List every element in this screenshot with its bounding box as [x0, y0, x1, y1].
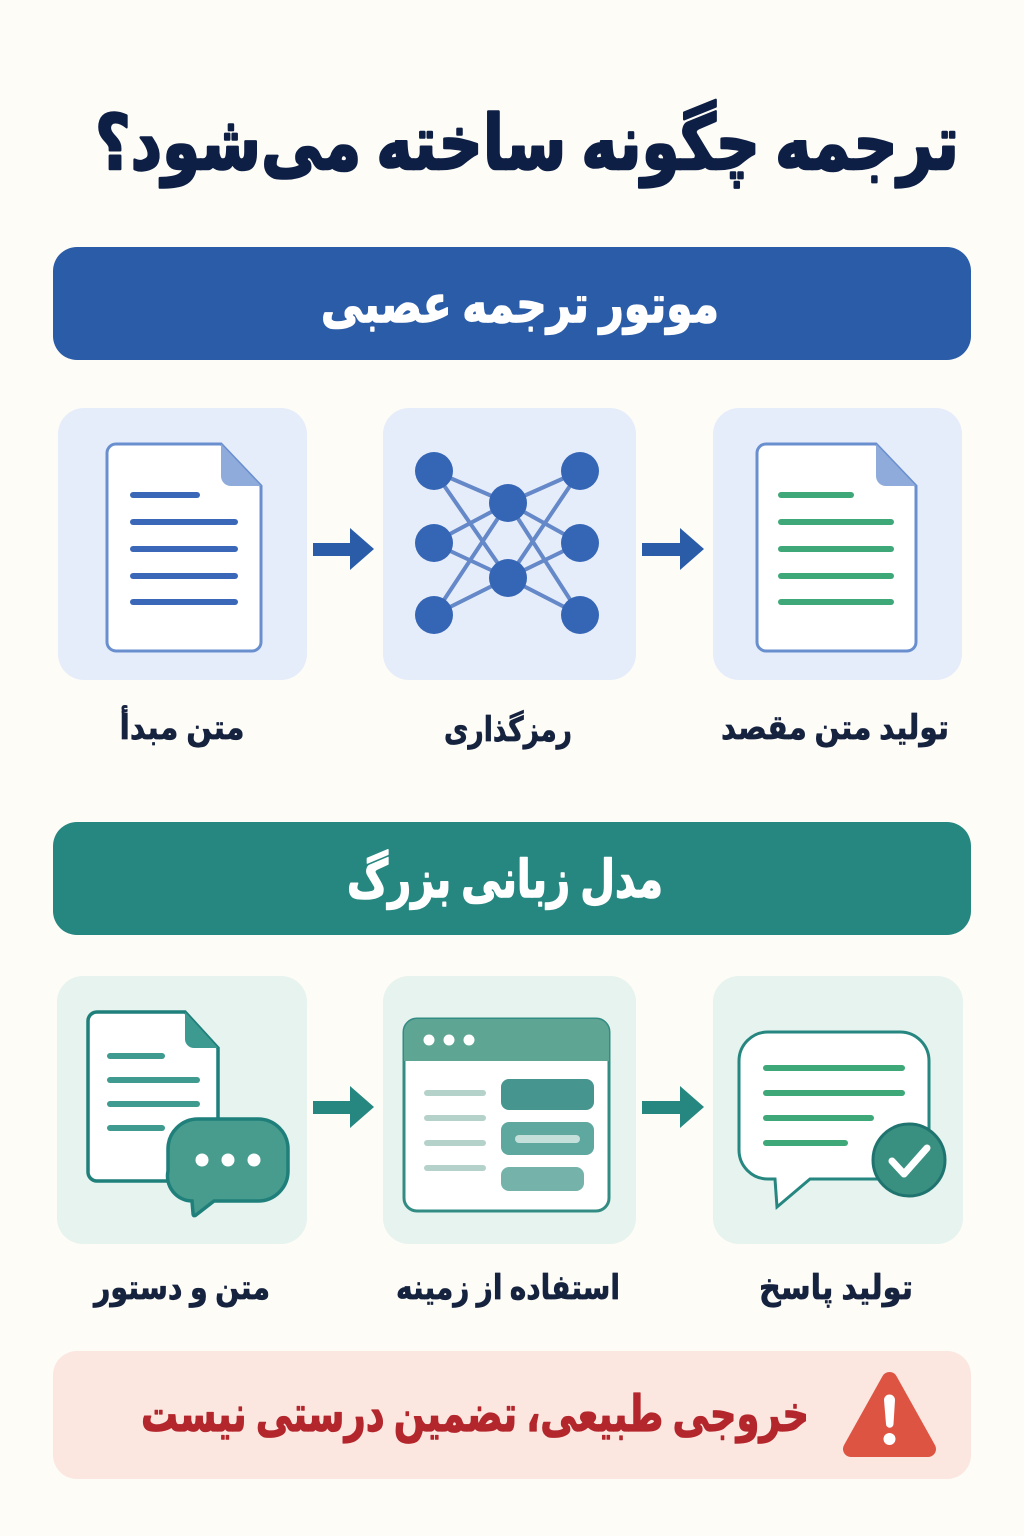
panel: text and prompt — [57, 976, 307, 1244]
panel: target text generation — [713, 408, 962, 680]
icon: neural network — [415, 452, 599, 634]
label: encoding: رمزگذاری — [444, 710, 572, 750]
callout: warning — [53, 1351, 971, 1479]
arrow: context to response — [642, 1086, 704, 1128]
arrow: source to encoding — [313, 528, 374, 570]
icon: response bubble with check — [739, 1032, 945, 1207]
icon: context window — [404, 1019, 609, 1211]
arrow: encoding to target — [642, 528, 704, 570]
icon: warning triangle — [851, 1380, 928, 1449]
icon: document with chat bubble — [88, 1012, 288, 1216]
label: target text generation: تولید متن مقصد — [721, 708, 949, 748]
icon: source document — [107, 444, 261, 651]
label: source text: متن مبدأ — [120, 705, 244, 748]
label: use of context: استفاده از زمینه — [396, 1268, 620, 1308]
panel: use of context — [383, 976, 636, 1244]
label: response generation: تولید پاسخ — [759, 1268, 913, 1308]
banner: large language model — [53, 822, 971, 935]
arrow: prompt to context — [313, 1086, 374, 1128]
banner: large language model: مدل زبانی بزرگ — [347, 849, 663, 910]
icon: target document — [757, 444, 916, 651]
panel: source text — [58, 408, 307, 680]
panel: response generation — [713, 976, 963, 1244]
panel: encoding — [383, 408, 636, 680]
banner: neural machine translation — [53, 247, 971, 360]
callout: warning: خروجی طبیعی، تضمین درستی نیست — [141, 1385, 809, 1444]
label: text and prompt: متن و دستور — [92, 1268, 270, 1308]
banner: neural machine translation: موتور ترجمه عصبی — [321, 275, 719, 335]
